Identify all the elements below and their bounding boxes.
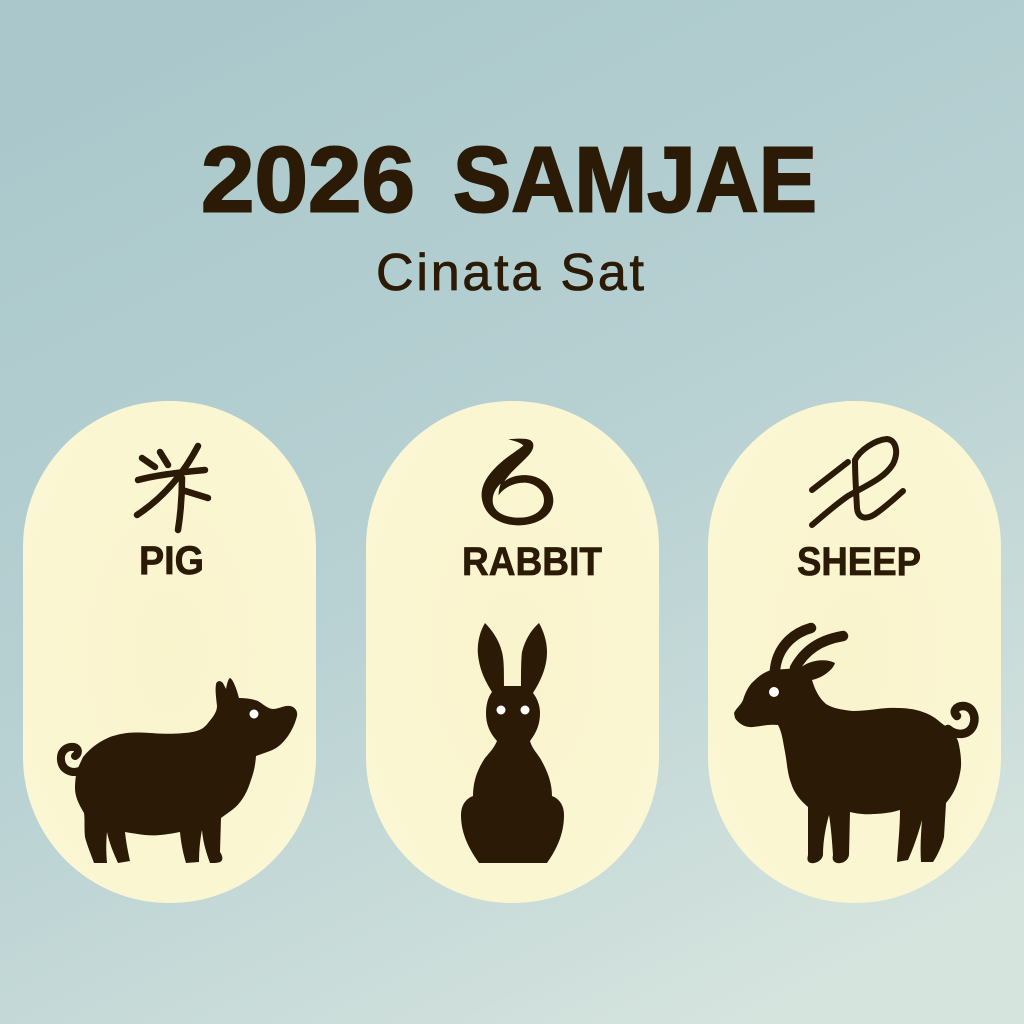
icon: pig silhouette: [61, 678, 297, 863]
panel: rabbit: [366, 401, 659, 903]
icon: rabbit glyph: [482, 439, 553, 525]
title: 2026: [201, 128, 415, 232]
label: rabbit: RABBIT: [462, 540, 602, 584]
label: sheep: SHEEP: [797, 540, 921, 584]
icon: pig glyph: [137, 446, 208, 530]
icon: sheep silhouette: [734, 628, 974, 863]
panel: pig: [23, 401, 316, 903]
panel: sheep: [708, 401, 1001, 903]
label: pig: PIG: [139, 539, 204, 583]
subtitle: Cinata Sat: [376, 244, 645, 302]
icon: rabbit silhouette: [461, 623, 564, 863]
title: SAMJAE: [453, 128, 817, 232]
icon: sheep glyph: [812, 439, 903, 525]
